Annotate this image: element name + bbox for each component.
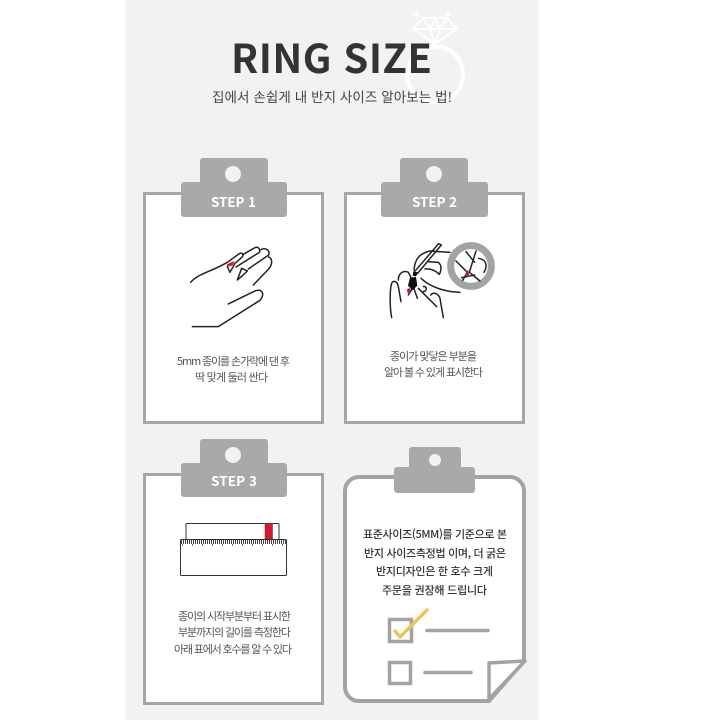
clip tab: step 1 — [181, 158, 287, 217]
step 2 label: STEP 2 — [412, 191, 457, 211]
step 3 label: STEP 3 — [211, 470, 257, 490]
step 3 description: 아래 표에서 호수를 알 수 있다 — [174, 641, 292, 657]
clip tab: step 2 — [381, 158, 488, 217]
icon: white diamond ring — [407, 10, 463, 102]
folded corner — [489, 661, 525, 699]
notice text: 주문을 권장해 드립니다 — [382, 582, 487, 598]
step 3 description — [174, 608, 292, 657]
panel: notice clipboard — [345, 447, 525, 701]
step 3 description: 부분까지의 길이를 측정한다 — [178, 624, 291, 640]
clip tab: notice — [394, 447, 475, 493]
title: RING SIZE — [231, 27, 432, 85]
clip tab: step 3 — [181, 439, 287, 497]
notice text — [363, 526, 507, 598]
panel: step 3 — [144, 439, 322, 704]
icon: hands marking paper with pencil — [390, 244, 491, 318]
step 1 label: STEP 1 — [211, 191, 256, 211]
notice text: 반지디자인은 한 호수 크게 — [376, 563, 493, 579]
step 1 description — [177, 353, 290, 385]
notice text: 표준사이즈(5MM)를 기준으로 본 — [363, 526, 507, 542]
icon: hand with paper ring — [191, 247, 272, 327]
background panel — [125, 0, 539, 720]
panel: step 1 — [144, 158, 322, 422]
subtitle: 집에서 손쉽게 내 반지 사이즈 알아보는 법! — [212, 86, 452, 106]
notice text: 반지 사이즈측정법 이며, 더 굵은 — [364, 545, 506, 561]
step 2 description — [384, 348, 483, 380]
step 2 description: 알아 볼 수 있게 표시한다 — [384, 364, 483, 380]
icon: checked box — [390, 610, 488, 642]
icon: paper strip on ruler — [180, 524, 286, 576]
inset magnifier — [451, 246, 491, 286]
panel: step 2 — [346, 158, 524, 422]
step 1 description: 딱 맞게 둘러 싼다 — [195, 369, 268, 385]
step 2 description: 종이가 맞닿은 부분을 — [390, 348, 477, 364]
step 3 description: 종이의 시작부분부터 표시한 — [178, 608, 291, 624]
icon: empty box — [390, 662, 471, 684]
step 1 description: 5mm 종이를 손가락에 댄 후 — [177, 353, 290, 369]
